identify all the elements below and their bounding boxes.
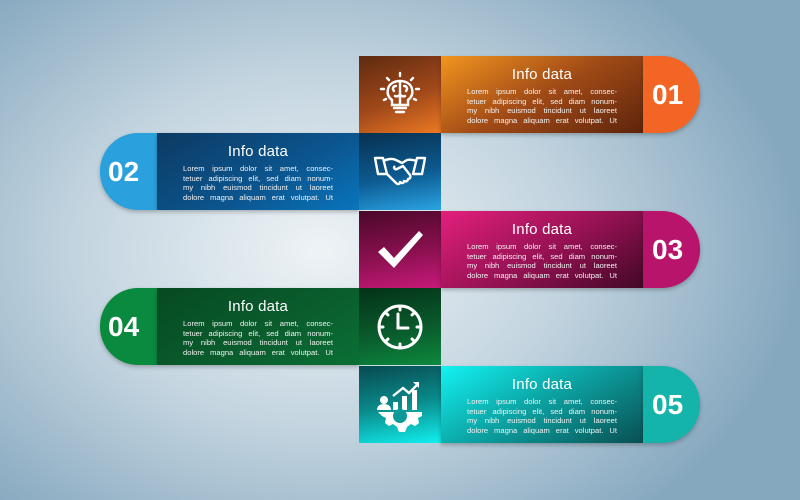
number 01: 01 bbox=[652, 78, 683, 110]
panel 01 text: tetuer adipiscing elit, sed diam nonum- bbox=[467, 97, 617, 106]
panel 05 text: Lorem ipsum dolor sit amet, consec- bbox=[467, 397, 617, 406]
number 03: 03 bbox=[652, 234, 683, 264]
panel 05 text: Info data bbox=[512, 376, 572, 393]
panel 01 text: Info data bbox=[512, 66, 572, 83]
panel 04 text bbox=[157, 288, 359, 365]
panel 03 text: tetuer adipiscing elit, sed diam nonum- bbox=[467, 252, 617, 261]
panel 01 text bbox=[441, 56, 643, 133]
panel 01 text: dolore magna aliquam erat volutpat. Ut bbox=[467, 116, 617, 125]
number 01 bbox=[643, 56, 700, 133]
panel 02 text: tetuer adipiscing elit, sed diam nonum- bbox=[183, 174, 333, 183]
panel 03 text: dolore magna aliquam erat volutpat. Ut bbox=[467, 271, 617, 280]
panel 04 text: dolore magna aliquam erat volutpat. Ut bbox=[183, 348, 333, 357]
number 05: 05 bbox=[652, 388, 683, 420]
icon: growth gear bbox=[359, 366, 441, 443]
panel 05 text: my nibh euismod tincidunt ut laoreet bbox=[467, 416, 617, 425]
panel 04 text: Info data bbox=[228, 298, 288, 315]
panel 05 text bbox=[441, 366, 643, 443]
panel 03 text: my nibh euismod tincidunt ut laoreet bbox=[467, 261, 617, 270]
panel 04 text: my nibh euismod tincidunt ut laoreet bbox=[183, 338, 333, 347]
panel 03 text: Info data bbox=[512, 221, 572, 238]
panel 03 text bbox=[441, 211, 643, 288]
number 04 bbox=[100, 288, 157, 365]
row 05 bbox=[359, 366, 702, 447]
icon: handshake bbox=[359, 133, 441, 210]
panel 02 text: dolore magna aliquam erat volutpat. Ut bbox=[183, 193, 333, 202]
panel 02 text bbox=[157, 133, 359, 210]
panel 02 text: Info data bbox=[228, 143, 288, 160]
row 03 bbox=[359, 210, 702, 292]
icon: lightbulb brain bbox=[359, 56, 441, 133]
number 03 bbox=[643, 211, 700, 288]
icon: clock bbox=[359, 288, 441, 365]
row 01 bbox=[359, 56, 702, 138]
row 04 bbox=[98, 288, 441, 370]
icon: checkmark bbox=[359, 211, 441, 288]
number 02 bbox=[100, 133, 157, 210]
panel 04 text: tetuer adipiscing elit, sed diam nonum- bbox=[183, 329, 333, 338]
panel 02 text: my nibh euismod tincidunt ut laoreet bbox=[183, 183, 333, 192]
panel 03 text: Lorem ipsum dolor sit amet, consec- bbox=[467, 242, 617, 251]
number 04: 04 bbox=[108, 310, 139, 342]
number 02: 02 bbox=[108, 156, 139, 186]
panel 04 text: Lorem ipsum dolor sit amet, consec- bbox=[183, 319, 333, 328]
number 05 bbox=[643, 366, 700, 443]
panel 05 text: dolore magna aliquam erat volutpat. Ut bbox=[467, 426, 617, 435]
row 02 bbox=[98, 132, 441, 214]
panel 01 text: my nibh euismod tincidunt ut laoreet bbox=[467, 106, 617, 115]
panel 05 text: tetuer adipiscing elit, sed diam nonum- bbox=[467, 407, 617, 416]
panel 01 text: Lorem ipsum dolor sit amet, consec- bbox=[467, 87, 617, 96]
panel 02 text: Lorem ipsum dolor sit amet, consec- bbox=[183, 164, 333, 173]
